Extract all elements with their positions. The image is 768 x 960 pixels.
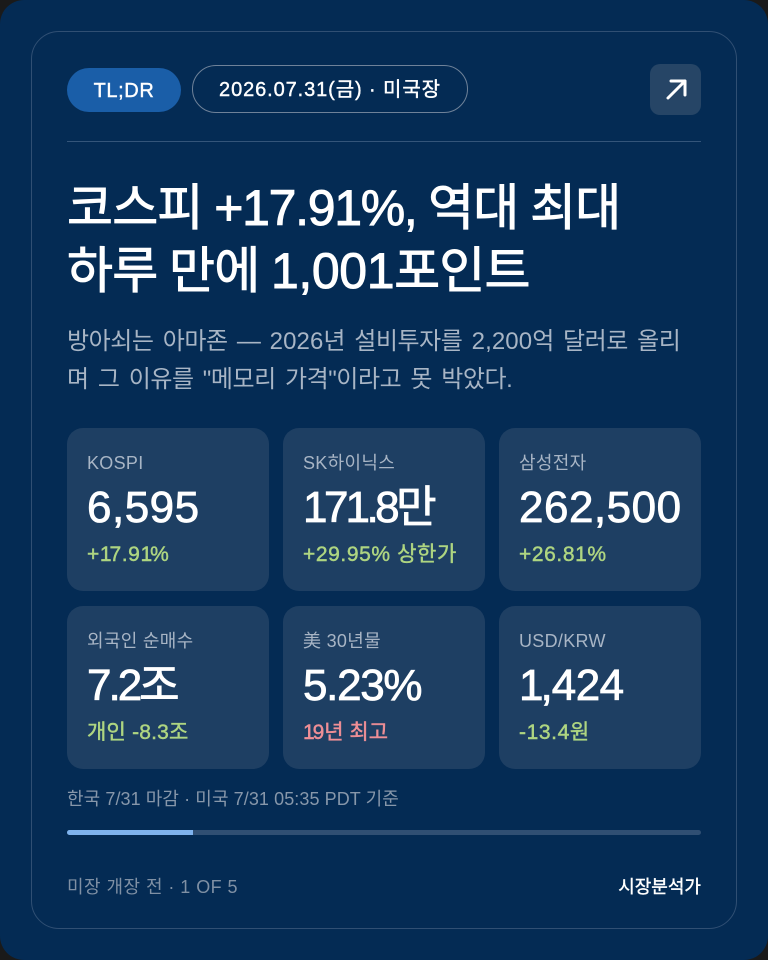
title <box>67 180 620 299</box>
badge: TL;DR: TL;DR <box>94 80 154 102</box>
change: 개인 -8.3조 <box>87 721 189 744</box>
title: 하루 만에 1,001포인트 <box>67 243 530 299</box>
progress fill <box>67 830 193 835</box>
label: 美 30년물 <box>303 631 381 651</box>
label: KOSPI <box>87 453 144 473</box>
subtitle: 며 그 이유를 "메모리 가격"이라고 못 박았다. <box>67 366 512 393</box>
panel: USD/KRW <box>499 606 701 769</box>
source note: 한국 7/31 마감 · 미국 7/31 05:35 PDT 기준 <box>67 789 399 809</box>
label: USD/KRW <box>519 631 606 651</box>
badge: TL;DR <box>67 68 181 112</box>
panel: US 30Y <box>283 606 485 769</box>
subtitle <box>67 328 680 393</box>
footer left: 미장 개장 전 · 1 OF 5 <box>67 877 238 897</box>
value: 7.2조 <box>87 661 180 710</box>
change: -13.4원 <box>519 721 590 744</box>
change: 19년 최고 <box>303 721 388 744</box>
change: +17.91% <box>87 543 169 566</box>
date pill <box>192 65 468 113</box>
label: 외국인 순매수 <box>87 631 193 651</box>
label: 삼성전자 <box>519 453 586 473</box>
footer right: 시장분석가 <box>618 877 701 897</box>
progress bar <box>67 830 701 835</box>
panel: SK hynix <box>283 428 485 591</box>
change: +26.81% <box>519 543 607 566</box>
title: 코스피 +17.91%, 역대 최대 <box>67 180 620 236</box>
divider <box>67 141 701 142</box>
date pill: 2026.07.31(금) · 미국장 <box>219 79 441 101</box>
subtitle: 방아쇠는 아마존 — 2026년 설비투자를 2,200억 달러로 올리 <box>67 328 680 355</box>
panel: foreign net selling <box>67 606 269 769</box>
change: +29.95% 상한가 <box>303 543 457 566</box>
value: 6,595 <box>87 483 200 532</box>
value: 262,500 <box>519 483 682 532</box>
label: SK하이닉스 <box>303 453 395 473</box>
icon: arrow button <box>650 64 701 115</box>
value: 5.23% <box>303 661 421 710</box>
value: 1,424 <box>519 661 624 710</box>
panel: Samsung <box>499 428 701 591</box>
panel: KOSPI <box>67 428 269 591</box>
value: 171.8만 <box>303 483 437 532</box>
